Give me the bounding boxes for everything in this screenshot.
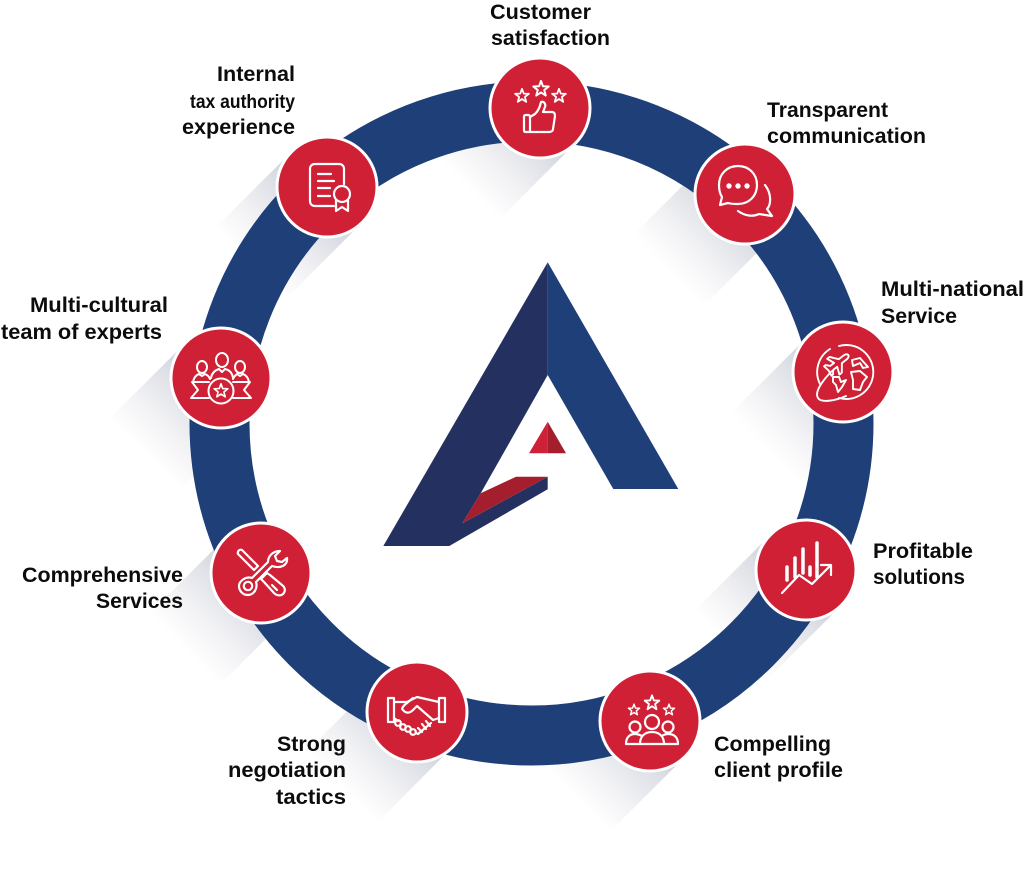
label: strong negotiation tactics: tactics — [276, 786, 346, 809]
label: internal tax authority experience: Internal — [217, 63, 295, 86]
label: customer satisfaction: Customer — [490, 1, 591, 24]
icon: globe with plane — [817, 345, 873, 401]
label: compelling client profile — [714, 733, 843, 782]
icon: clients with stars — [626, 695, 678, 744]
label: multi-cultural team of experts — [1, 294, 168, 344]
label: multi-national service — [881, 278, 1024, 328]
label: compelling client profile: client profile — [714, 759, 843, 782]
badge: transparent communication — [695, 144, 795, 244]
icon: rising chart — [782, 543, 831, 593]
label: profitable solutions — [873, 540, 973, 589]
label: multi-cultural team of experts: Multi-cultural — [30, 294, 168, 317]
label: customer satisfaction — [490, 1, 610, 50]
icon: chat bubbles — [719, 166, 772, 216]
label: multi-cultural team of experts: team of experts — [1, 321, 162, 344]
label: strong negotiation tactics: Strong — [277, 733, 346, 756]
badge: compelling client profile — [600, 671, 700, 771]
badge: multi-cultural team — [171, 328, 271, 428]
badge: internal tax authority experience — [277, 137, 377, 237]
label: comprehensive services — [22, 564, 183, 613]
label: customer satisfaction: satisfaction — [491, 27, 610, 50]
badge: strong negotiation tactics — [367, 662, 467, 762]
label: transparent communication — [767, 99, 926, 148]
label: compelling client profile: Compelling — [714, 733, 831, 756]
blue ring — [220, 112, 844, 736]
icon: stars and thumbs up — [515, 81, 566, 132]
badge: profitable solutions — [756, 520, 856, 620]
label: multi-national service: Multi-national — [881, 278, 1024, 301]
icon: team with star medal — [191, 353, 251, 404]
label: comprehensive services: Comprehensive — [22, 564, 183, 587]
label: strong negotiation tactics: negotiation — [228, 759, 346, 782]
icon: certificate document — [310, 164, 350, 211]
label: profitable solutions: solutions — [873, 566, 965, 589]
label: profitable solutions: Profitable — [873, 540, 973, 563]
icon: wrench and screwdriver — [238, 550, 287, 595]
label: internal tax authority experience: tax authority — [190, 91, 295, 113]
central logo — [383, 262, 678, 546]
label: transparent communication: Transparent — [767, 99, 888, 122]
long shadows behind the ring — [109, 73, 878, 833]
icon: handshake — [388, 697, 445, 735]
badge: comprehensive services — [211, 523, 311, 623]
label: strong negotiation tactics — [228, 733, 346, 809]
badge: customer satisfaction — [490, 58, 590, 158]
label: internal tax authority experience — [182, 63, 295, 139]
label: transparent communication: communication — [767, 125, 926, 148]
badge: multi-national service — [793, 322, 893, 422]
label: comprehensive services: Services — [96, 590, 183, 613]
label: multi-national service: Service — [881, 305, 957, 328]
label: internal tax authority experience: experience — [182, 116, 295, 139]
